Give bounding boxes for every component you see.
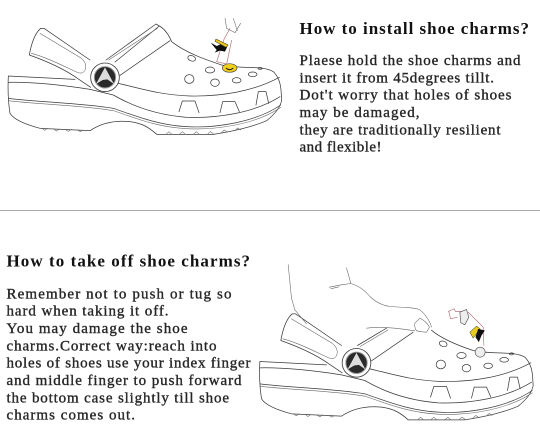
illustration: shoe with charm being installed (8, 18, 282, 134)
shoe outline (260, 314, 533, 420)
shoe vents (430, 377, 520, 398)
shoe logo badge (91, 63, 119, 92)
text block: install instructions: and flexible! (300, 140, 382, 156)
text block: install instructions (300, 53, 521, 156)
text block: take-off instructions: Remember not to push or tug so (6, 286, 232, 302)
text block: install instructions: insert it from 45degrees tillt. (300, 70, 494, 86)
text block: take-off instructions: charms comes out. (6, 408, 135, 424)
foot pushing on shoe (288, 265, 431, 332)
text block: take-off instructions: You may damage the shoe (6, 321, 188, 337)
shoe outline (8, 24, 282, 134)
charm stem with install arrow (211, 18, 241, 64)
text block: take-off instructions: the bottom case slightly till shoe (6, 390, 229, 406)
charm: yellow smiley (222, 64, 237, 72)
text block: take-off instructions: holes of shoes use your index finger (6, 356, 250, 372)
text block: take-off instructions: charms.Correct way:reach into (6, 338, 216, 354)
text block: install instructions: may be damaged, (300, 105, 420, 121)
heading: take off: How to take off shoe charms? (6, 252, 250, 271)
shoe vents (179, 92, 269, 113)
text block: install instructions: they are traditionally resilient (300, 122, 501, 138)
text block: install instructions: Plaese hold the shoe charms and (300, 53, 521, 69)
charm popping out with arrow (448, 309, 485, 357)
text block: take-off instructions: and middle finger to push forward (6, 373, 242, 389)
text block: install instructions: Dot't worry that holes of shoes (300, 88, 512, 104)
shoe holes (436, 340, 513, 372)
heading: install: How to install shoe charms? (300, 19, 529, 38)
illustration: shoe with finger pushing charm out (260, 265, 533, 420)
section divider (0, 210, 540, 211)
text block: take-off instructions (6, 286, 250, 424)
shoe logo badge (342, 348, 371, 377)
shoe holes (185, 54, 262, 86)
text block: take-off instructions: hard when taking it off. (6, 304, 168, 320)
